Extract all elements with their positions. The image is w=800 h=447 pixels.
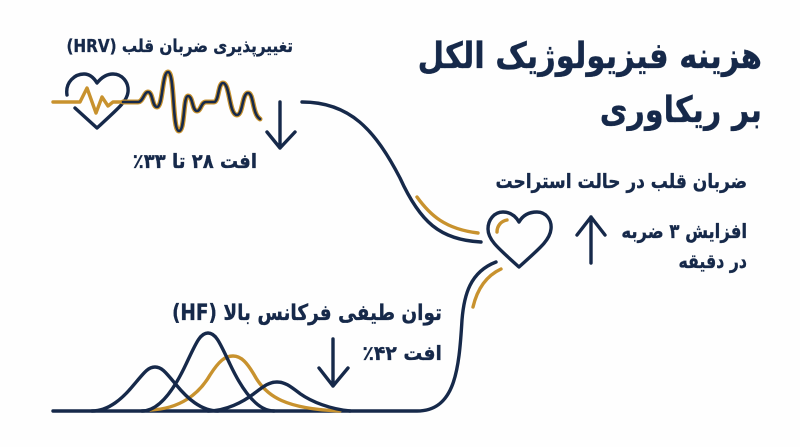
heading: HRV: تغییرپذیری ضربان قلب (HRV) [66, 36, 293, 57]
text: resting heart rate increase: افزایش ۳ ضربه [621, 221, 747, 243]
icon: heart [488, 212, 551, 267]
chart: spectral curves [92, 333, 350, 411]
text: HF drop: افت ۴۲٪ [362, 341, 442, 365]
panel: resting heart rate [488, 171, 747, 274]
curve: left peak [92, 367, 218, 411]
heading: resting heart rate: ضربان قلب در حالت استراحت [495, 171, 747, 193]
text: resting heart rate increase [621, 221, 747, 274]
icon: heart with ECG line [53, 74, 128, 128]
arrow: down [319, 339, 348, 386]
connector: HF to heart [53, 262, 496, 411]
curve: centre peak [142, 333, 274, 411]
text: resting heart rate increase: در دقیقه [678, 250, 747, 274]
connector accent: HF to heart [473, 269, 501, 307]
title: بر ریکاوری [600, 88, 762, 132]
panel: heart rate variability [53, 36, 295, 173]
heading: HF: توان طیفی فرکانس بالا (HF) [172, 299, 442, 325]
text: HRV drop: افت ۲۸ تا ۳۳٪ [133, 150, 257, 173]
curve: right peak [208, 382, 350, 411]
panel: high frequency power [92, 299, 442, 411]
arrow: up [577, 217, 605, 263]
connector accent: HRV to heart [417, 197, 478, 233]
chart: HRV waveform [123, 72, 260, 131]
arrow: down [267, 102, 295, 148]
connector: HRV to heart [302, 102, 481, 242]
title [418, 35, 762, 132]
title: هزینه فیزیولوژیک الکل [418, 35, 762, 78]
curve: orange peak [150, 356, 340, 411]
